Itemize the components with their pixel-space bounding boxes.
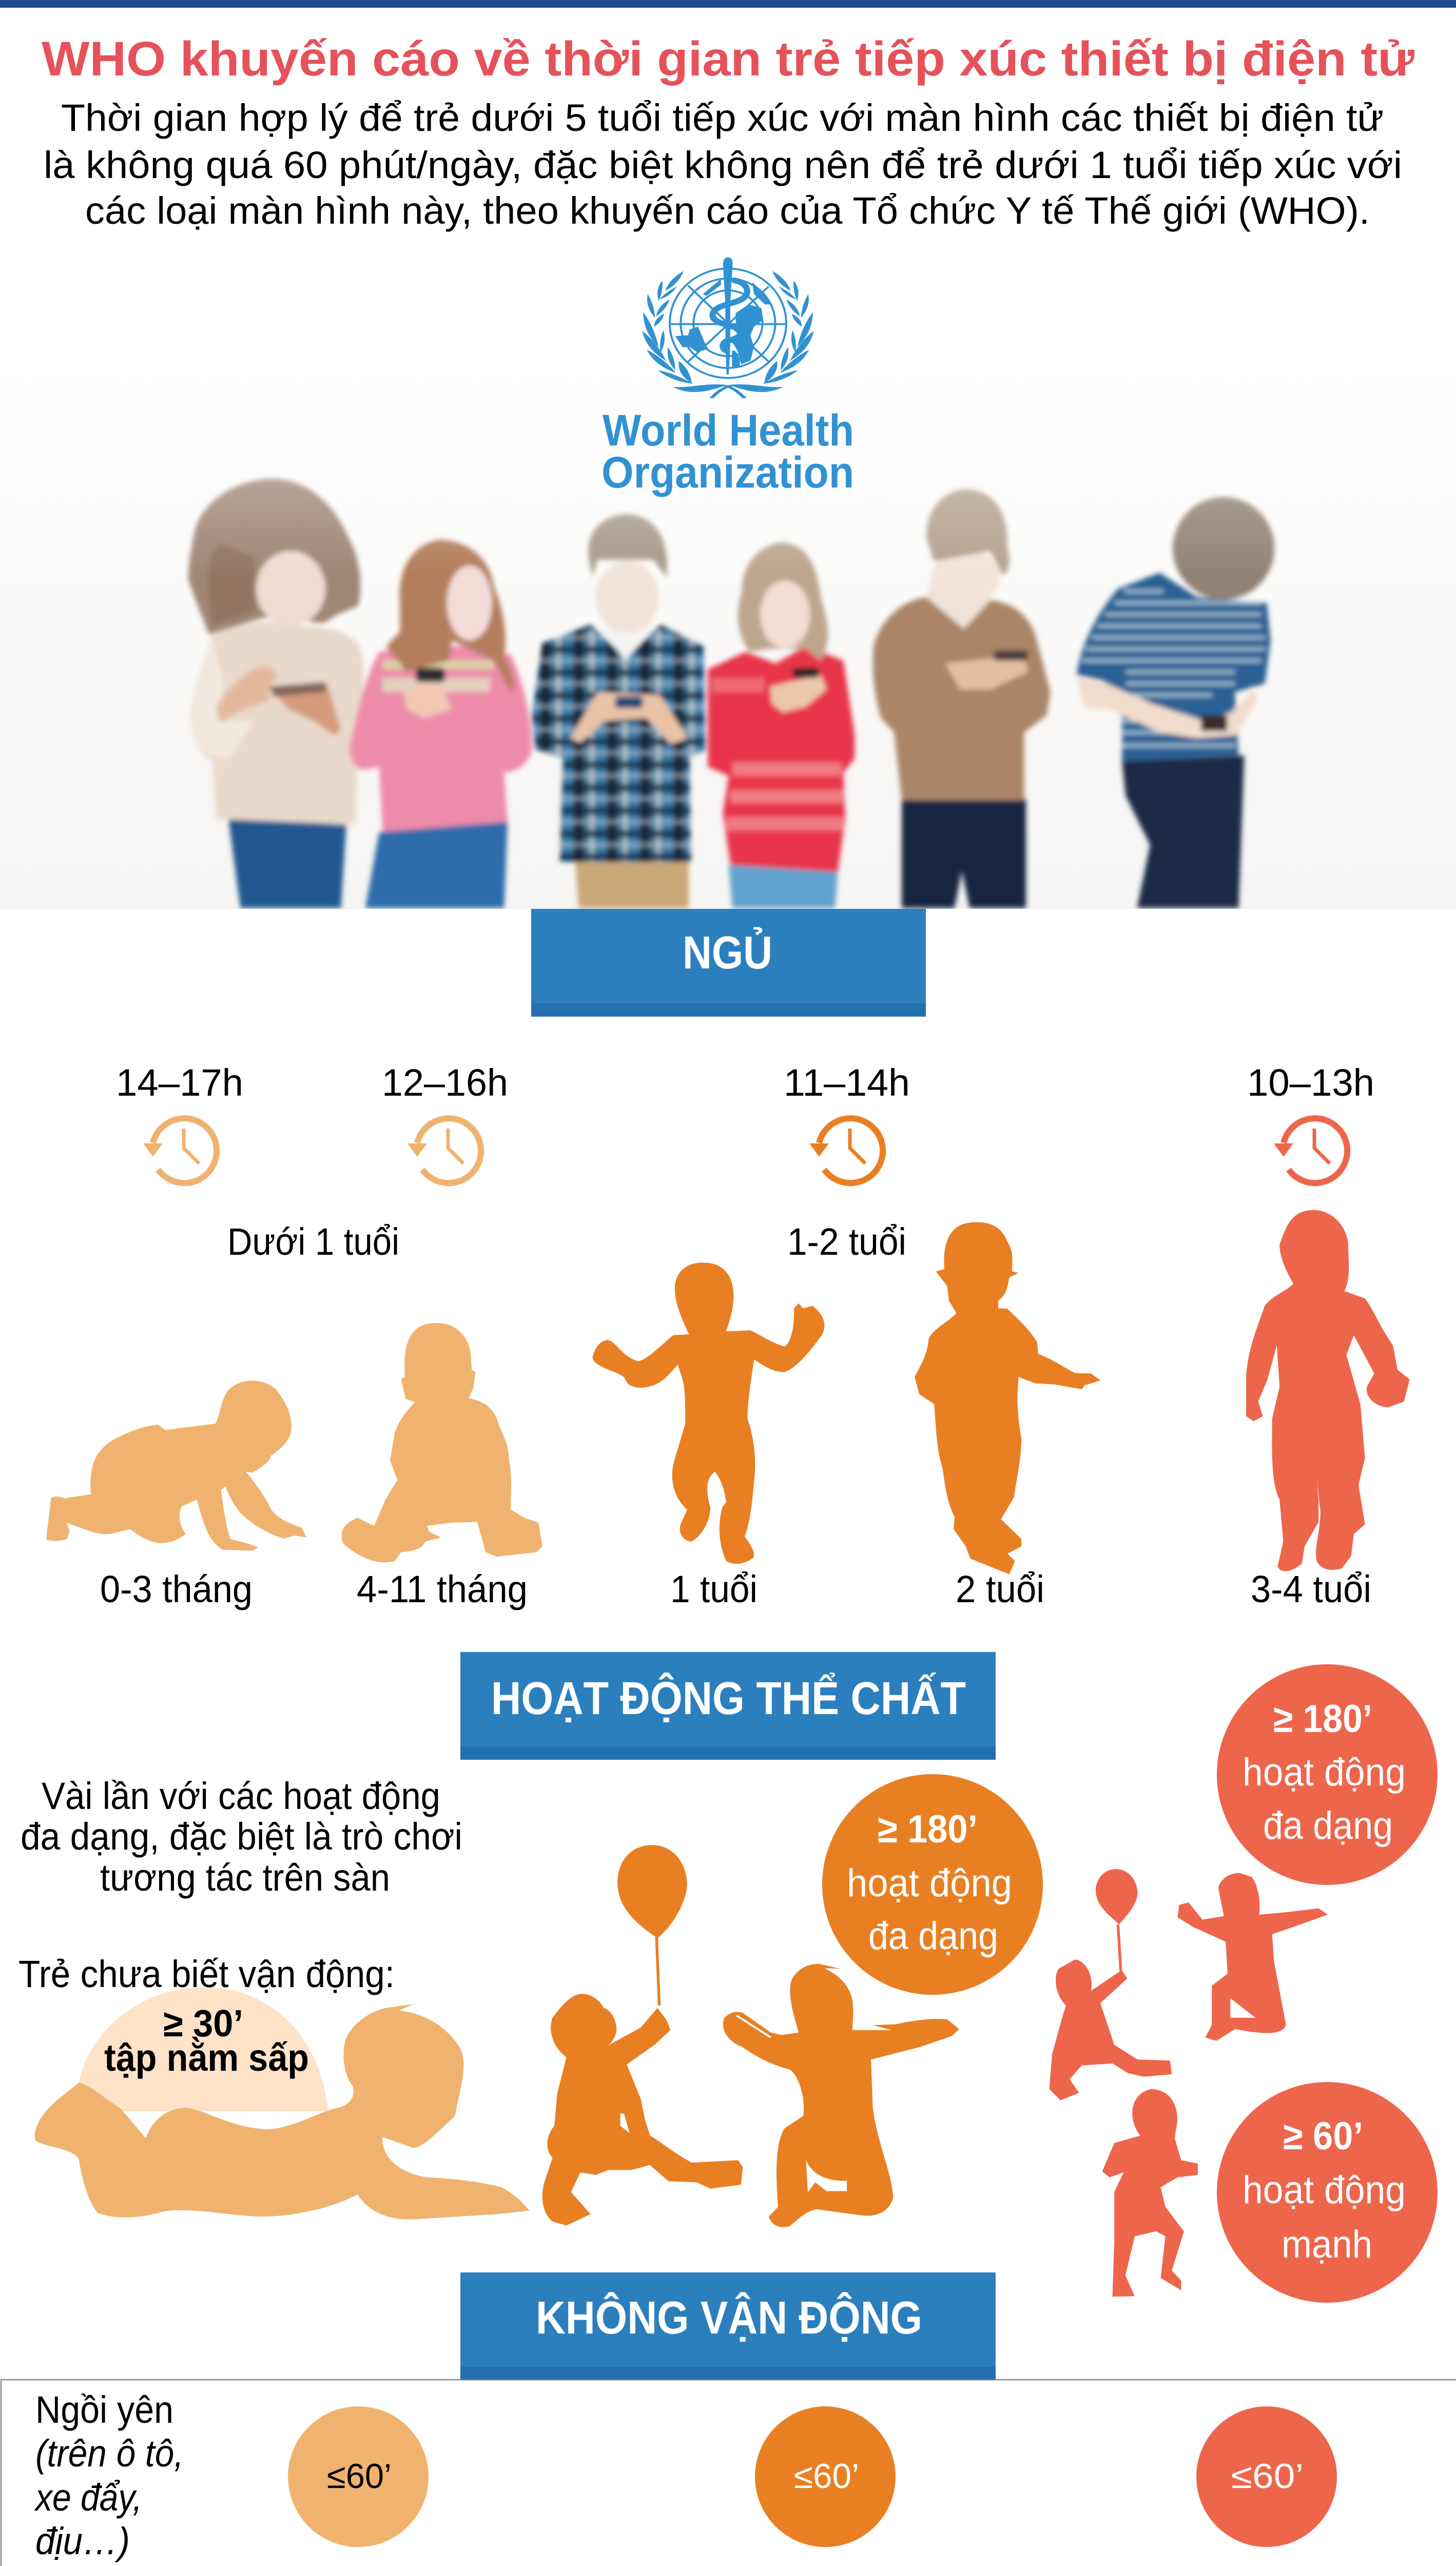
age group labels [227,1220,906,1263]
icon: clock 0-3 months [143,1118,217,1183]
intro text: Thời gian hợp lý để trẻ dưới 5 tuổi tiếp xúc với màn hình các thiết bị điện tử [61,96,1384,139]
row panel: sitting still [1,2380,1456,2566]
kid 2 [365,822,508,908]
sleep durations [116,1061,1374,1104]
WHO logo: World Health [603,406,854,455]
heading: KHÔNG VẬN ĐỘNG [460,2272,996,2380]
callout: coral 180 minutes: hoạt động [1243,1751,1406,1794]
silhouette: 1 year old [592,1262,824,1564]
silhouette: orange toddler with balloon [542,1845,743,2225]
callout: tummy time bubble [79,1987,328,2111]
callout: coral 60 minutes [1217,2082,1438,2303]
icon: clock 3-4 years [1274,1118,1347,1183]
text: not yet mobile, tummy time: ≥ 30’ [163,2002,243,2045]
age group labels: Dưới 1 tuổi [227,1220,399,1263]
age labels under silhouettes: 0-3 tháng [100,1568,253,1610]
heading: HOẠT ĐỘNG THỂ CHẤT: HOẠT ĐỘNG THỂ CHẤT [491,1672,966,1724]
row text: sitting still: địu…) [35,2520,130,2562]
sleep durations: 12–16h [382,1061,508,1104]
sleep durations: 10–13h [1247,1061,1374,1104]
wreath left [642,271,732,398]
callout: orange 180 minutes: đa dạng [868,1914,998,1958]
kid 1 [228,818,346,908]
continents [675,327,708,352]
kid 5 [902,799,1026,908]
top bar [0,0,1456,8]
text: not yet mobile, tummy time [18,1953,395,2079]
callout: orange 180 minutes: hoạt động [847,1861,1012,1905]
badge: 60 min light [288,2406,429,2547]
heading: NGỦ [531,909,926,1017]
badge: 60 min coral [1196,2406,1337,2547]
wreath right [724,271,814,398]
icon: clock 1-2 years [809,1118,883,1183]
heading: KHÔNG VẬN ĐỘNG: KHÔNG VẬN ĐỘNG [536,2291,922,2344]
heading: NGỦ: NGỦ [683,926,772,979]
text: varied activities: Vài lần với các hoạt động [42,1775,440,1817]
silhouette: coral walking toddler [1102,2089,1198,2297]
text: not yet mobile, tummy time: Trẻ chưa biết vận động: [18,1953,395,1995]
text: varied activities [21,1775,462,1899]
kid 6 [1122,755,1244,908]
WHO logo [601,258,854,497]
age labels under silhouettes: 2 tuổi [956,1568,1044,1610]
callout: coral 180 minutes [1217,1664,1438,1885]
callout: orange 180 minutes [822,1774,1043,1995]
row text: sitting still: (trên ô tô, [35,2432,184,2475]
sleep durations: 11–14h [784,1061,910,1104]
badge: 60 min light: ≤60’ [327,2457,392,2496]
age labels under silhouettes: 3-4 tuổi [1251,1568,1371,1610]
callout: coral 60 minutes: ≥ 60’ [1283,2114,1363,2158]
badge: 60 min orange: ≤60’ [794,2457,859,2496]
row text: sitting still: Ngồi yên [35,2388,173,2431]
staff and snake [723,258,733,375]
intro text [44,96,1402,232]
globe rings [670,268,786,378]
callout: coral 60 minutes: hoạt động [1243,2168,1406,2212]
badge: 60 min orange [755,2406,896,2547]
callout: coral 180 minutes: ≥ 180’ [1273,1697,1372,1741]
row text: sitting still [34,2388,184,2562]
intro text: các loại màn hình này, theo khuyến cáo của Tổ chức Y tế Thế giới (WHO). [85,189,1370,232]
WHO logo: Organization [601,448,854,497]
silhouette: 3-4 year old [1246,1210,1410,1571]
silhouettes: coral toddlers with balloon [1050,1869,1328,2101]
kid 4 [729,865,838,908]
silhouette: sitting baby [341,1323,542,1562]
silhouette: baby lying on tummy [35,2004,529,2220]
sleep durations: 14–17h [116,1061,243,1104]
age labels under silhouettes: 4-11 tháng [357,1568,528,1610]
silhouette: 2 year old [915,1222,1100,1574]
silhouette: orange toddler kneeling [723,1964,959,2227]
badge: 60 min coral: ≤60’ [1231,2457,1304,2496]
photo: children using phones [0,475,1456,909]
intro text: là không quá 60 phút/ngày, đặc biệt không nên để trẻ dưới 1 tuổi tiếp xúc với [44,144,1402,186]
title: WHO khuyến cáo về thời gian trẻ tiếp xúc thiết bị điện tử [42,32,1414,86]
age group labels: 1-2 tuổi [787,1220,906,1263]
callout: coral 60 minutes: mạnh [1282,2223,1372,2266]
kid 3 [575,862,689,908]
age labels under silhouettes [100,1568,1371,1610]
text: varied activities: tương tác trên sàn [100,1856,390,1899]
heading: HOẠT ĐỘNG THỂ CHẤT [460,1652,996,1760]
callout: coral 180 minutes: đa dạng [1263,1804,1393,1848]
text: varied activities: đa dạng, đặc biệt là trò chơi [21,1815,462,1858]
age labels under silhouettes: 1 tuổi [670,1568,758,1610]
row text: sitting still: xe đẩy, [34,2476,142,2519]
icon: clock 4-11 months [407,1118,481,1183]
callout: orange 180 minutes: ≥ 180’ [878,1807,978,1851]
text: not yet mobile, tummy time: tập nằm sấp [104,2036,309,2079]
silhouette: crawling baby [46,1381,306,1551]
